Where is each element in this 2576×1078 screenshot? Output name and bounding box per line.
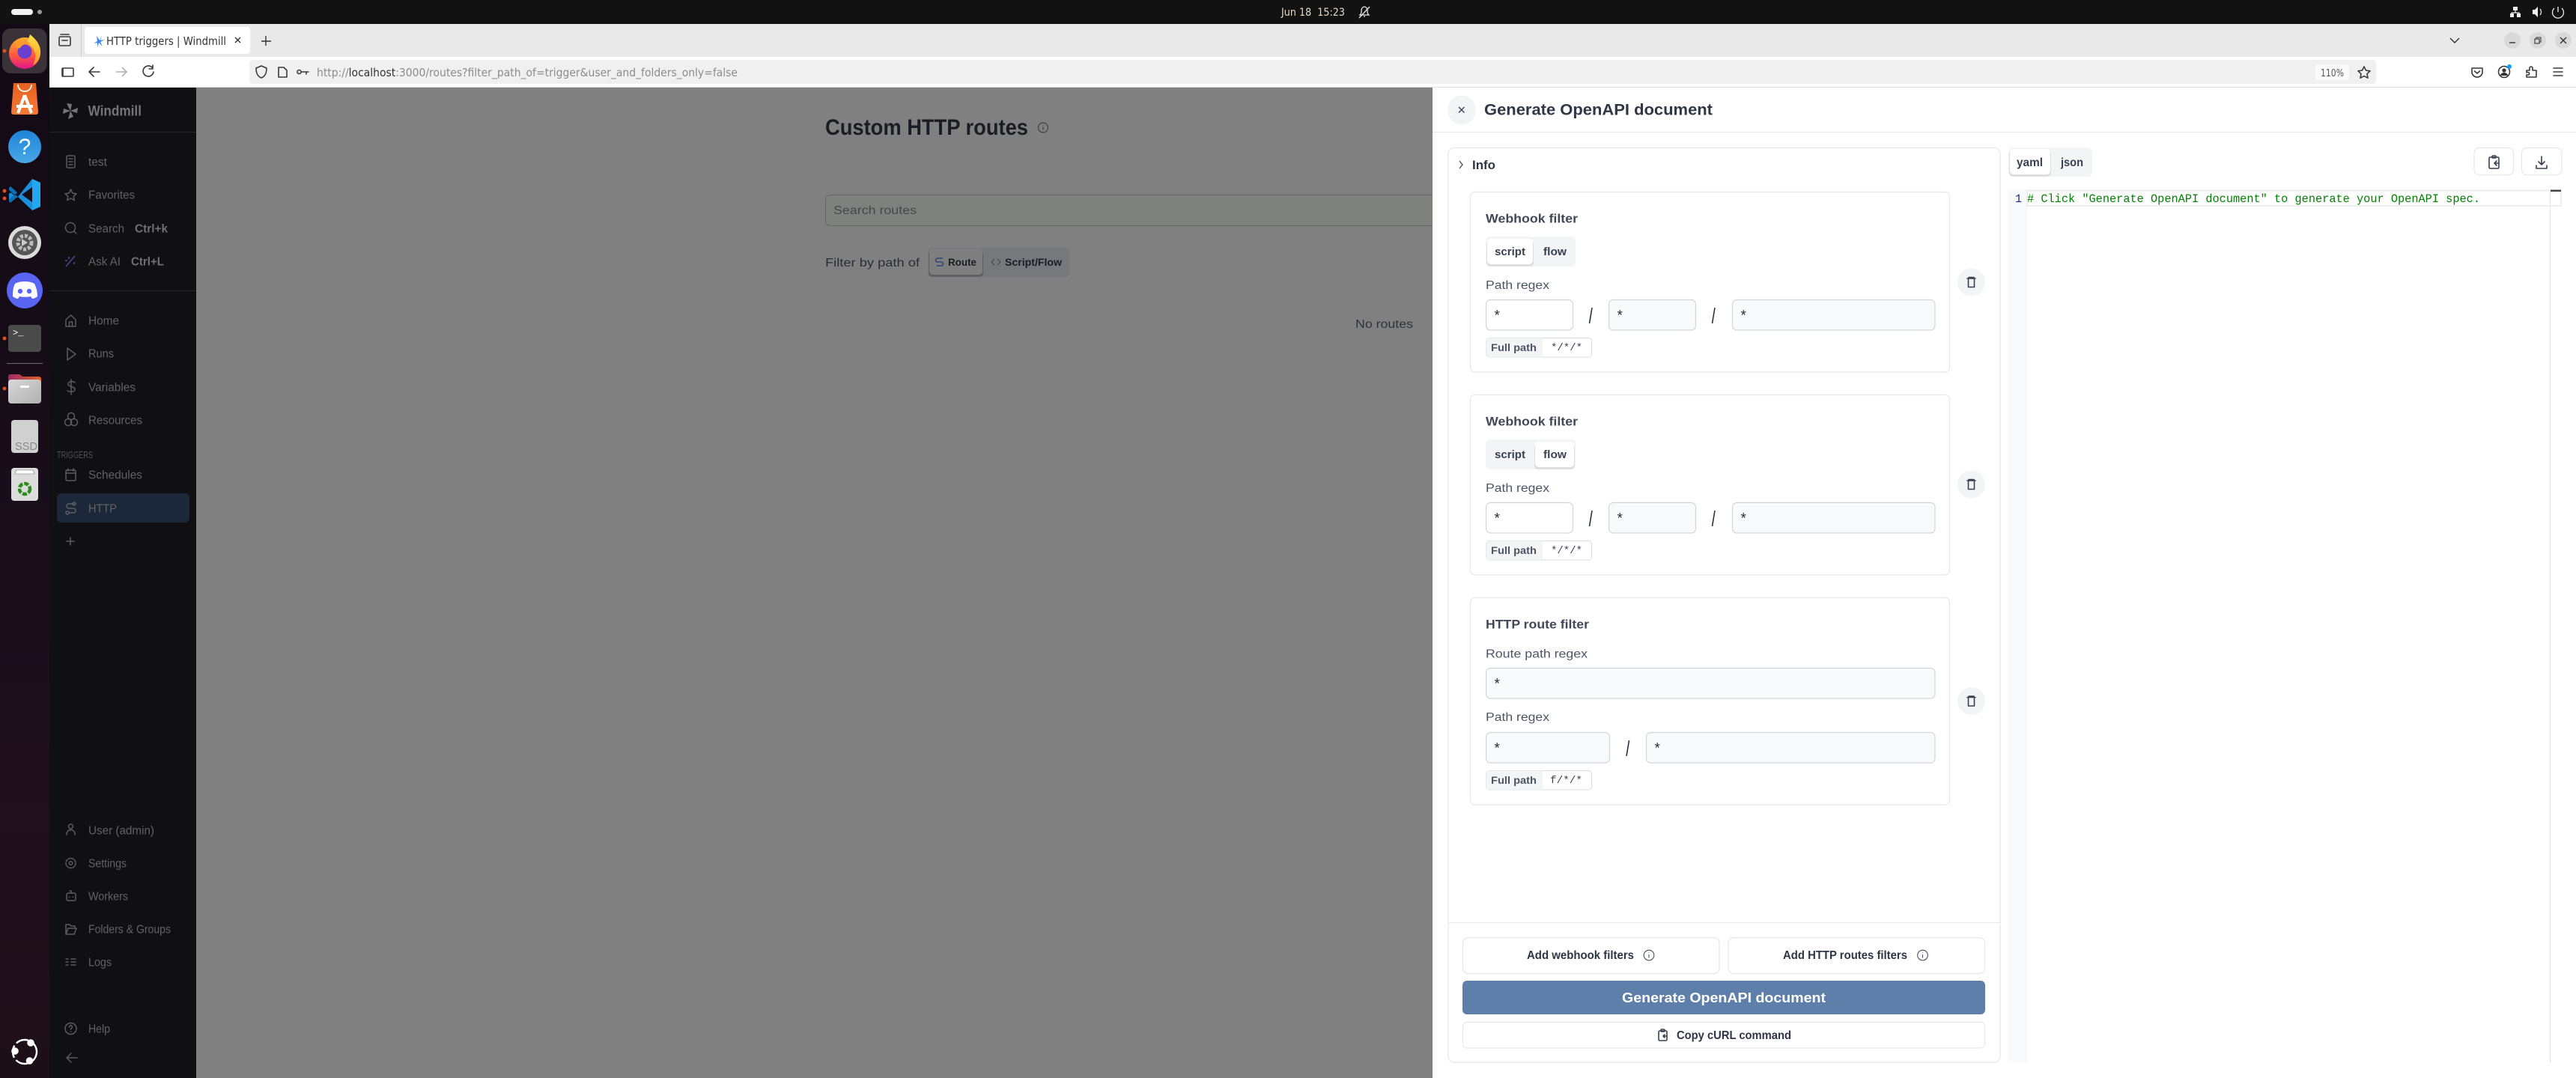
full path chip: Full path: [1491, 774, 1537, 786]
dock icon: settings: [8, 226, 41, 259]
nav item: search: Ctrl+k: [135, 223, 168, 235]
delete button 1: [1957, 268, 1985, 296]
nav item: logs: Logs: [88, 957, 112, 969]
dock icon: vs code: [3, 179, 40, 210]
path inputs: *: [1739, 308, 1748, 325]
browser tab bar: [49, 24, 2576, 57]
top system bar: [0, 0, 2576, 24]
nav item: favorites: Favorites: [88, 189, 135, 202]
toggle: script selected: script: [1495, 246, 1525, 258]
nav item: help: Help: [88, 1023, 110, 1036]
nav item: http active: [57, 493, 189, 523]
icon: add trigger: [67, 538, 74, 545]
windmill logo and name: [63, 103, 142, 120]
icon: tab list chevron: [2450, 38, 2459, 43]
copy curl button: [1463, 1023, 1984, 1048]
nav item: schedules: Schedules: [88, 469, 142, 482]
toggle: flow selected: [1486, 439, 1576, 469]
nav item: variables: [67, 380, 136, 395]
browser toolbar: [49, 57, 2576, 88]
search routes input: [825, 195, 1499, 226]
nav item: ask ai: Ctrl+L: [131, 256, 164, 268]
drawer panel: [1433, 88, 2576, 1078]
nav item: folders and groups: Folders & Groups: [88, 924, 171, 936]
http route filter card: Path regex: [1486, 711, 1549, 724]
nav item: ask ai: Ask AI: [88, 256, 121, 268]
add webhook filters button: [1463, 937, 1719, 973]
nav item: test: test: [88, 156, 108, 169]
path inputs: *: [1653, 741, 1662, 758]
full path chip: */*/*: [1551, 343, 1582, 354]
output panel: [2008, 147, 2562, 1062]
dock icon: firefox: [2, 28, 46, 73]
dock icon: help: ?: [19, 135, 31, 159]
nav item: runs: [67, 347, 114, 361]
dock icon: app center: [11, 83, 38, 115]
webhook filter card: flow: [1471, 395, 1950, 575]
icon: muted bell: [1359, 7, 1370, 18]
add http routes filters button: [1728, 937, 1984, 973]
format toggle: [2008, 147, 2092, 177]
icon: shield: [256, 66, 267, 78]
system tray icons: [2510, 7, 2564, 18]
path inputs: *: [1493, 308, 1501, 325]
nav item: test: [67, 156, 108, 169]
nav item: settings: Settings: [88, 858, 127, 870]
search routes input: Search routes: [833, 204, 917, 217]
icon: profile: [2498, 64, 2512, 78]
webhook filter card: script: Webhook filter: [1486, 213, 1579, 226]
toggle: script selected: flow: [1543, 246, 1567, 258]
nav item: settings: [66, 858, 127, 870]
nav item: schedules: [66, 469, 142, 482]
format toggle: yaml: [2017, 156, 2043, 169]
full path chip: Full path: [1491, 341, 1537, 353]
full path chip: f/*/*: [1550, 776, 1582, 787]
icon: route: [936, 258, 944, 266]
page title: Custom HTTP routes: [825, 115, 1028, 140]
icon: extensions: [2527, 67, 2536, 77]
dock: [0, 24, 49, 1078]
delete button 2: [1957, 470, 1985, 499]
icon: pocket: [2472, 68, 2482, 77]
zoom level: 110%: [2321, 68, 2344, 79]
active tab: HTTP triggers | Windmill: [106, 34, 226, 48]
path inputs: *: [1739, 511, 1748, 528]
zoom level: [2315, 64, 2349, 80]
close button: [1448, 96, 1476, 124]
http route filter card: Route path regex: [1486, 648, 1588, 660]
dock icon: ubuntu logo: [11, 1039, 37, 1065]
nav item: help: [65, 1023, 110, 1036]
webhook filter card: flow: Path regex: [1486, 482, 1549, 495]
webhook filter card: flow: Webhook filter: [1486, 415, 1579, 428]
url bar: [249, 60, 2376, 84]
icon: back: [89, 67, 100, 76]
dimmed page content: [196, 88, 1499, 1078]
generate button: [1462, 981, 1985, 1014]
dock icon: ssd: [11, 420, 38, 453]
full path chip: [1486, 771, 1592, 790]
full path chip: */*/*: [1551, 546, 1582, 557]
icon: bookmark star: [2358, 67, 2370, 78]
dock icon: help: [8, 130, 41, 163]
active tab: [85, 27, 250, 54]
nav item: user: User (admin): [88, 825, 154, 837]
nav item: search: Search: [88, 223, 124, 235]
icon: sidebar toggle: [62, 68, 73, 76]
full path chip: [1486, 338, 1592, 357]
nav item: runs: Runs: [88, 347, 114, 361]
icon: key: [297, 70, 309, 74]
webhook filter card: script: Path regex: [1486, 279, 1549, 292]
icon: page: [279, 67, 287, 77]
dock icon: ssd: SSD: [15, 440, 37, 453]
line number: 1: [2015, 192, 2022, 206]
toggle: flow selected: flow: [1543, 448, 1567, 461]
generate button: Generate OpenAPI document: [1622, 990, 1826, 1005]
filter by path label: Filter by path of: [825, 257, 920, 270]
icon: reload: [143, 65, 154, 76]
path inputs: *: [1616, 308, 1624, 325]
nav item: favorites: [65, 189, 135, 202]
copy button: [2474, 148, 2513, 175]
nav item: logs: [66, 957, 112, 969]
filters panel: [1448, 148, 2000, 1062]
windmill logo and name: Windmill: [88, 103, 142, 120]
path inputs: *: [1616, 511, 1624, 528]
icon: firefox view: [59, 34, 70, 46]
dock icon: terminal: >_: [13, 328, 24, 338]
drawer title: Generate OpenAPI document: [1484, 100, 1713, 118]
nav item: workers: Workers: [88, 891, 128, 903]
nav item: workers: [67, 891, 128, 903]
format toggle: json: [2060, 156, 2083, 169]
webhook filter card: script: [1471, 192, 1950, 372]
toggle: script selected: [1486, 237, 1576, 267]
copy curl button: Copy cURL command: [1677, 1029, 1791, 1042]
windmill sidebar: [49, 88, 196, 1078]
delete button 3: [1957, 687, 1985, 715]
activities indicator: [11, 9, 42, 15]
path inputs: [1486, 299, 1935, 330]
placeholder comment: # Click "Generate OpenAPI document" to generate your OpenAPI spec.: [2027, 192, 2480, 206]
icon: collapse sidebar: [67, 1053, 77, 1062]
route path input: [1486, 668, 1935, 698]
clock: Jun 18 15:23: [1281, 7, 1345, 19]
window controls: [2504, 32, 2572, 49]
icon: menu: [2554, 68, 2563, 76]
add http routes filters button: Add HTTP routes filters: [1783, 949, 1907, 962]
filter toggle: Script/Flow: [1005, 256, 1062, 268]
dock icon: trash: [11, 468, 38, 501]
nav item: http active: HTTP: [88, 503, 117, 515]
route path input: *: [1493, 677, 1501, 693]
http route filter card: HTTP route filter: [1486, 618, 1590, 632]
nav item: home: Home: [88, 314, 119, 328]
path inputs: *: [1493, 511, 1501, 528]
download button: [2522, 148, 2562, 175]
nav item: search: [66, 223, 168, 235]
add webhook filters button: Add webhook filters: [1527, 949, 1634, 962]
full path chip: [1486, 540, 1592, 560]
nav item: variables: Variables: [88, 382, 136, 394]
dock icon: files: [3, 374, 41, 404]
dock icon: terminal: [3, 325, 41, 352]
filter toggle: Route: [948, 256, 976, 268]
nav item: resources: [64, 413, 142, 427]
toggle: flow selected: script: [1495, 448, 1525, 461]
nav item: ask ai: [65, 256, 164, 268]
icon: new tab: [261, 36, 271, 46]
dock icon: discord: [7, 272, 43, 308]
nav item: home: [66, 314, 119, 328]
path inputs: [1486, 732, 1935, 763]
empty state: No routes: [1355, 318, 1413, 331]
section label: triggers: TRIGGERS: [57, 450, 93, 460]
info disclosure: Info: [1472, 159, 1495, 172]
url: http://localhost:3000/routes?filter_path_of=trigger&user_and_folders_only=false: [317, 66, 738, 80]
path inputs: *: [1493, 741, 1501, 758]
filter toggle: [928, 248, 1069, 277]
nav item: resources: Resources: [88, 415, 142, 427]
code editor: [2008, 189, 2561, 1062]
icon: forward: [116, 67, 127, 76]
path inputs: [1486, 503, 1935, 533]
info disclosure: [1459, 159, 1495, 172]
full path chip: Full path: [1491, 544, 1537, 556]
http route filter card: [1471, 597, 1950, 805]
icon: title info: [1038, 123, 1048, 133]
